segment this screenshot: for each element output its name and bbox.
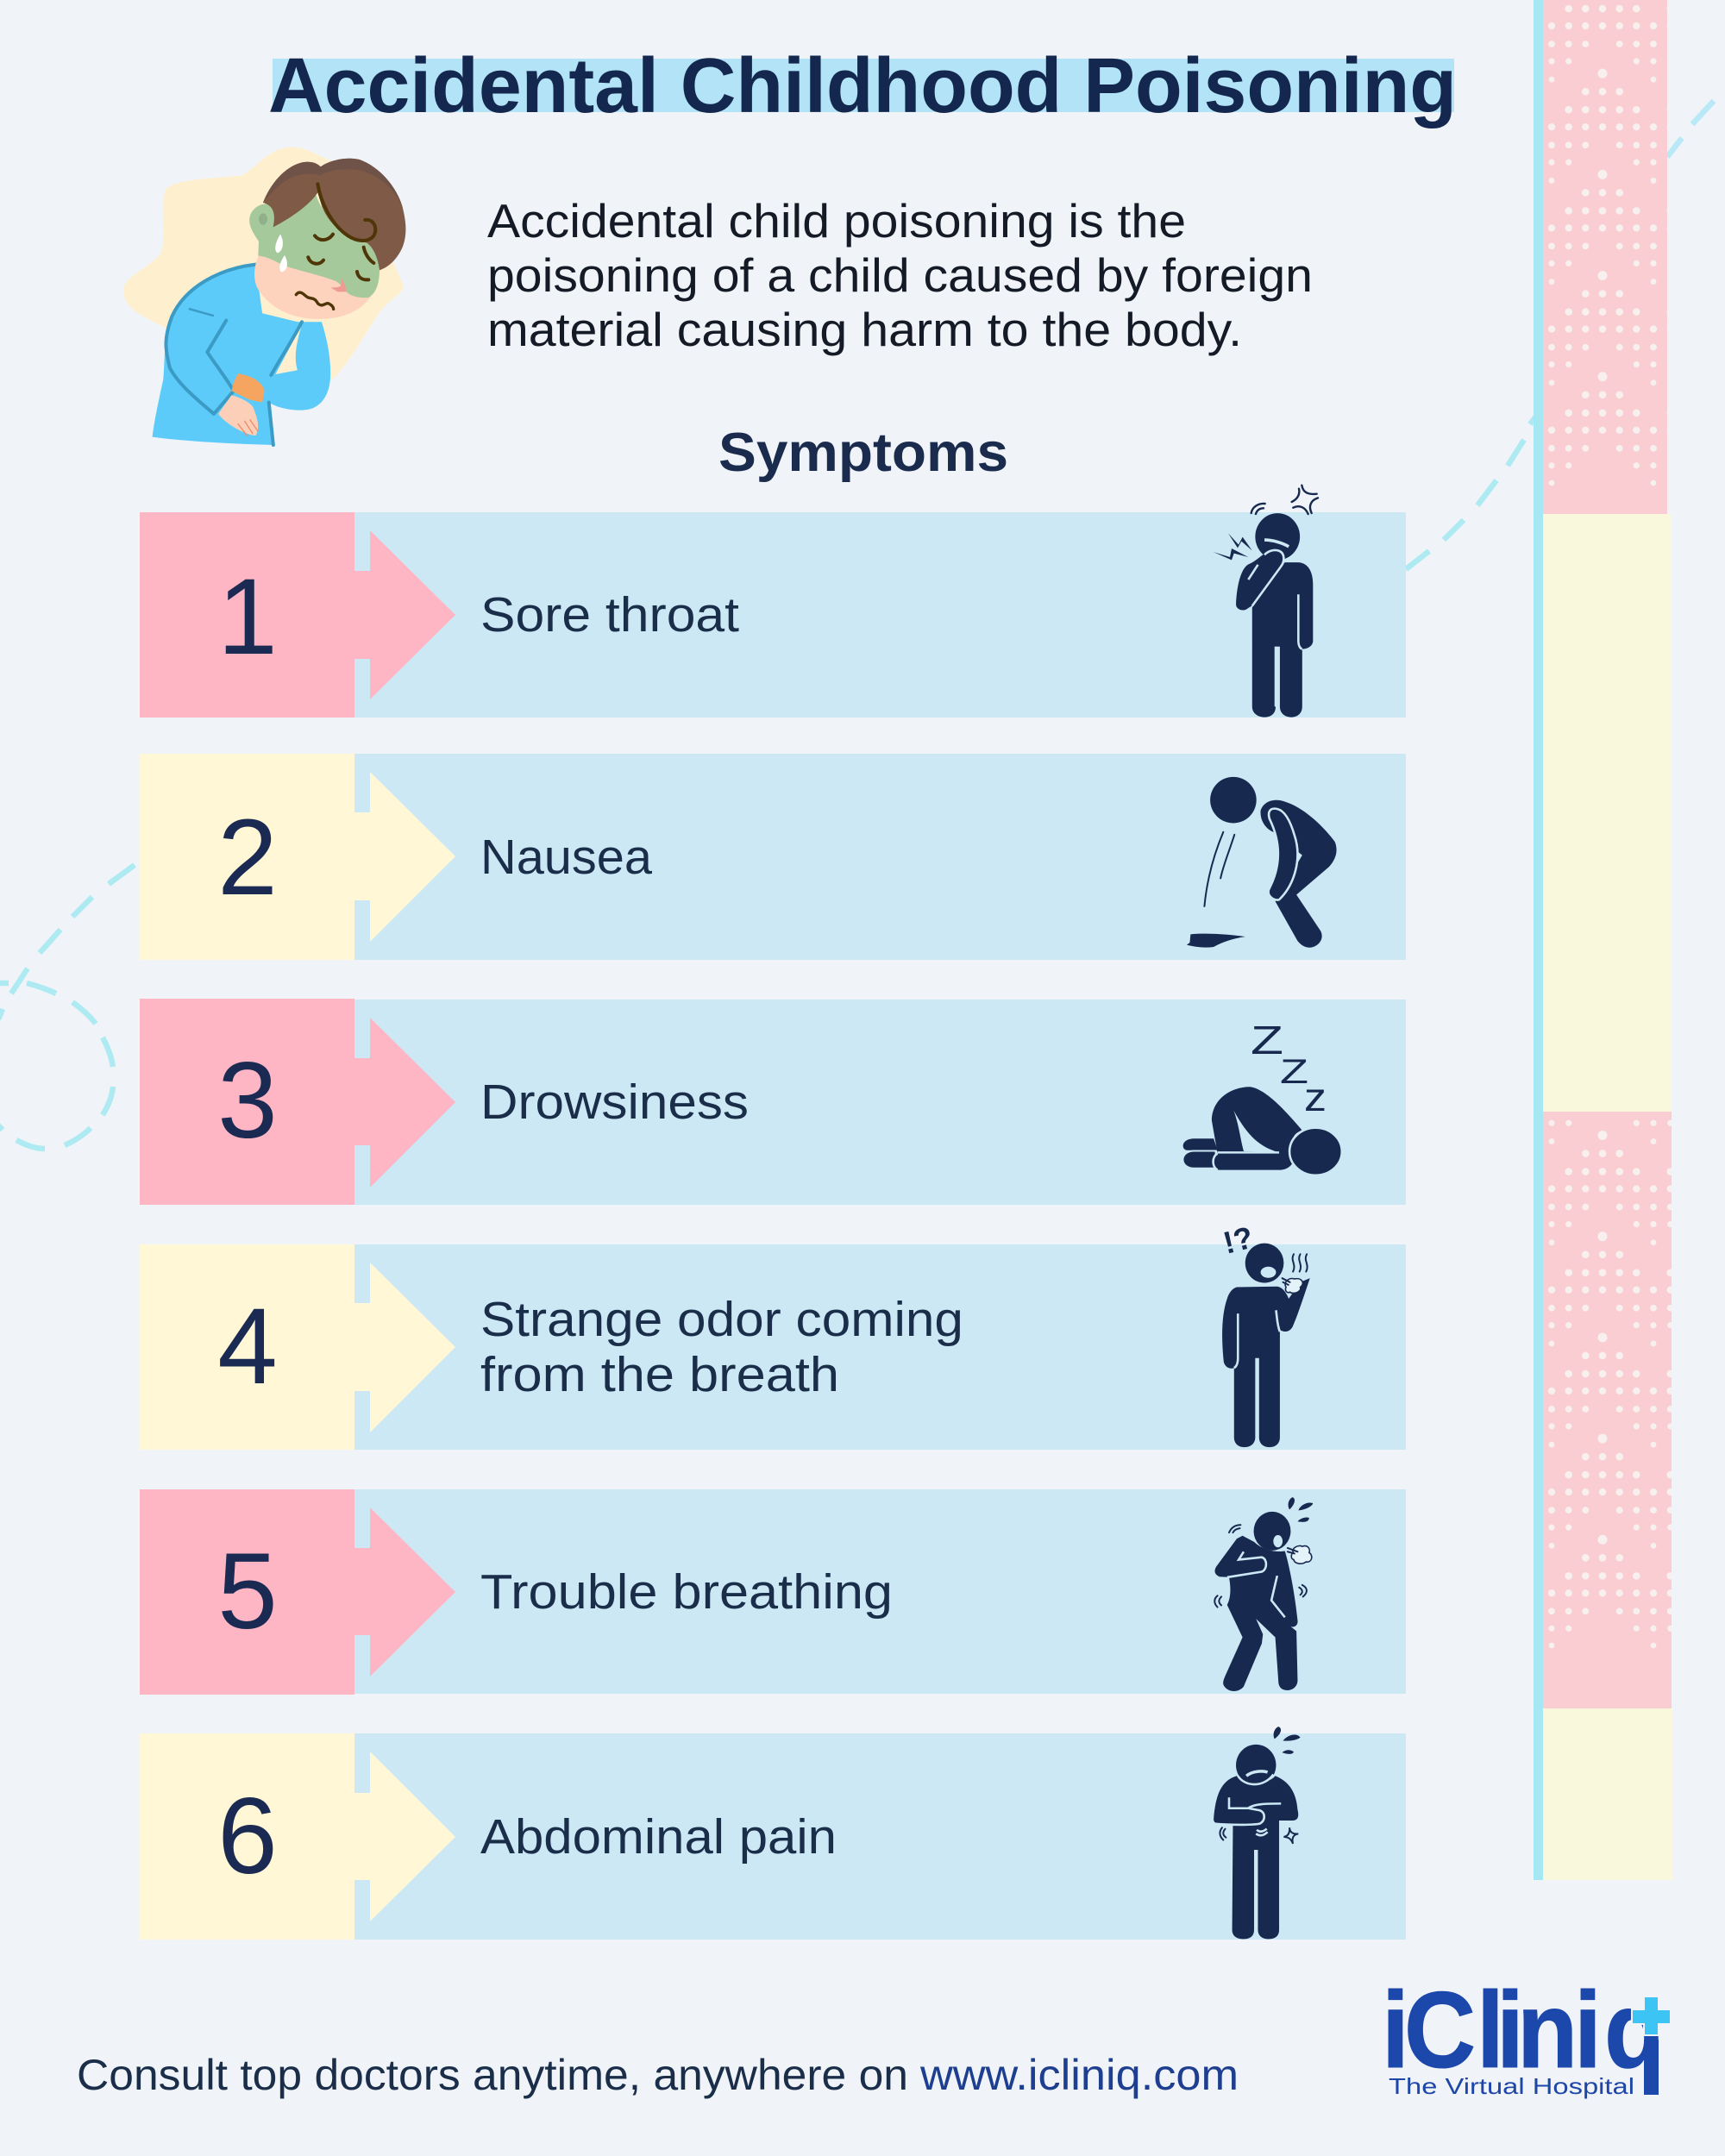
row 3: drowsiness xyxy=(140,999,1406,1205)
decorative dashed line and circle: left side xyxy=(0,865,135,1149)
number box 6: 6 xyxy=(217,1777,278,1896)
icon: person with sore throat xyxy=(1214,486,1318,718)
arrow 6 xyxy=(354,1752,455,1921)
icon: person sleeping, head down: z xyxy=(1304,1075,1327,1119)
intro text: Accidental child poisoning is the xyxy=(487,195,1186,248)
heading: Symptoms: Symptoms xyxy=(718,423,1008,483)
intro text: poisoning of a child caused by foreign xyxy=(487,249,1313,302)
title: Accidental Childhood Poisoning xyxy=(268,43,1457,129)
arrow 4 xyxy=(354,1263,455,1432)
label 2: Nausea xyxy=(480,830,652,885)
right column: cyan stripe xyxy=(1534,0,1543,1880)
icon: person vomiting xyxy=(1187,777,1337,948)
icon: person short of breath xyxy=(1214,1497,1313,1691)
row 5: trouble breathing xyxy=(140,1489,1406,1695)
icon: person sleeping, head down: Z xyxy=(1251,1018,1283,1062)
footer text xyxy=(77,2051,1239,2099)
number box 5 xyxy=(140,1489,354,1695)
label 5: Trouble breathing xyxy=(480,1564,893,1620)
number box 1 xyxy=(140,512,354,718)
icon: person holding abdomen xyxy=(1214,1727,1301,1940)
footer text: Consult top doctors anytime, anywhere on xyxy=(77,2051,908,2099)
number box 2 xyxy=(140,754,354,960)
logo: iCliniq: iCliniq xyxy=(1382,1971,1665,2090)
icon: person sleeping, head down: Z xyxy=(1280,1053,1308,1091)
decorative dashed line: upper right xyxy=(1406,101,1714,569)
number box 3 xyxy=(140,999,354,1205)
number box 4 xyxy=(140,1244,354,1450)
row 6: abdominal pain xyxy=(140,1727,1406,1940)
icon: person smelling breath xyxy=(1220,1219,1310,1447)
number box 2: 2 xyxy=(217,798,278,918)
number box 4: 4 xyxy=(217,1287,278,1407)
intro text: material causing harm to the body. xyxy=(487,304,1242,356)
footer text: www.icliniq.com xyxy=(919,2051,1239,2099)
label 4: from the breath xyxy=(480,1347,839,1402)
arrow 3 xyxy=(354,1018,455,1188)
label 1: Sore throat xyxy=(480,587,739,642)
logo: iCliniq: The Virtual Hospital xyxy=(1389,2073,1634,2099)
right column: pink dotted panel bottom xyxy=(1543,1112,1672,1708)
right column: pink dotted panel top xyxy=(1543,0,1667,514)
label 6: Abdominal pain xyxy=(480,1809,837,1865)
label 4: Strange odor coming xyxy=(480,1292,963,1347)
number box 5: 5 xyxy=(217,1532,278,1651)
number box 6 xyxy=(140,1733,354,1940)
icon: person smelling breath: !? xyxy=(1220,1219,1257,1261)
arrow 5 xyxy=(354,1507,455,1677)
illustration: sick child holding stomach xyxy=(123,147,405,445)
intro text xyxy=(487,195,1313,356)
row 4: strange breath odor xyxy=(140,1219,1406,1450)
right column: yellow panel top xyxy=(1543,514,1671,1112)
right column: yellow panel bottom xyxy=(1543,1708,1672,1880)
number box 3: 3 xyxy=(217,1041,278,1161)
row 1: sore throat xyxy=(140,486,1406,718)
row 2: nausea xyxy=(140,754,1406,960)
logo plus sign xyxy=(1632,1996,1671,2035)
number box 1: 1 xyxy=(217,557,278,677)
icon: person sleeping, head down xyxy=(1182,1018,1342,1175)
arrow 2 xyxy=(354,772,455,942)
label 3: Drowsiness xyxy=(480,1075,749,1130)
arrow 1 xyxy=(354,530,455,699)
label 4 xyxy=(480,1292,963,1402)
